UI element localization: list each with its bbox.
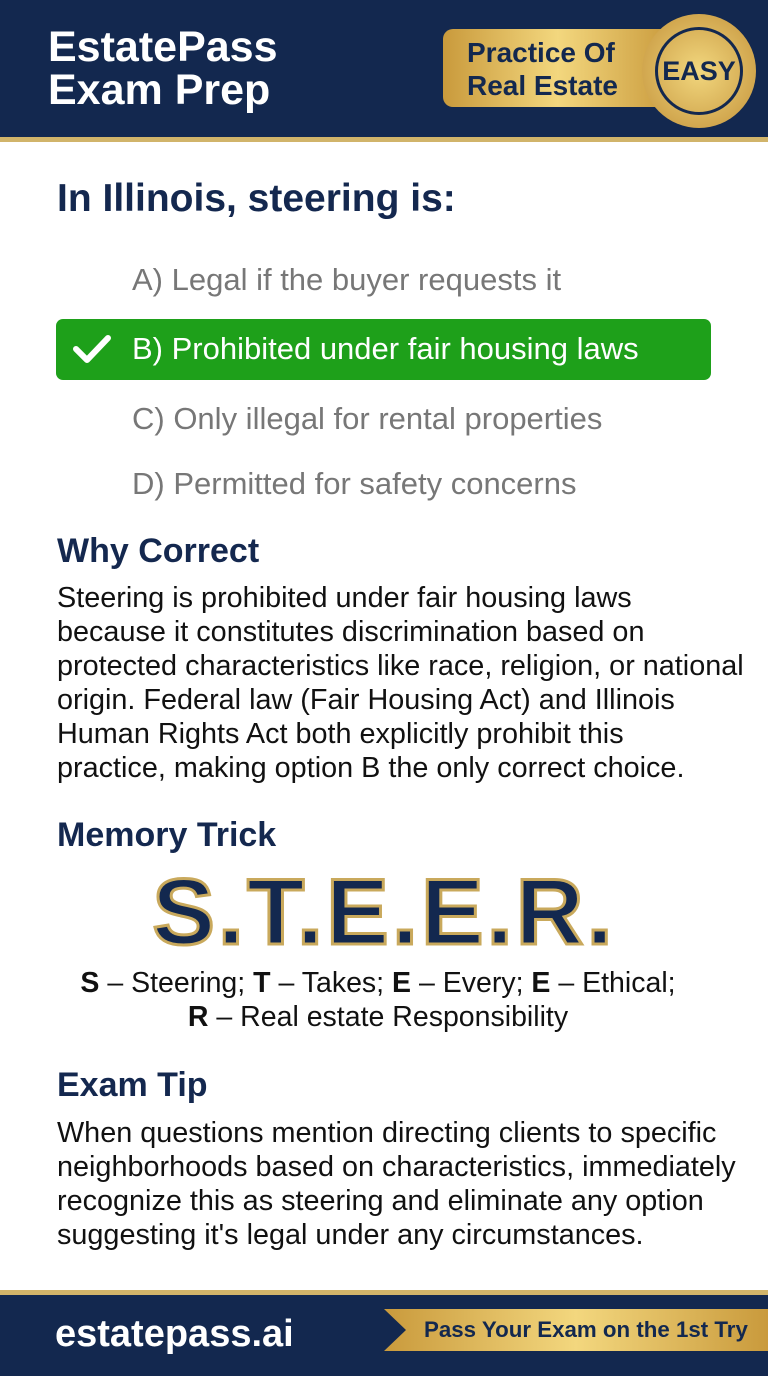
text: why correct: because it constitutes discrimination based on [57,616,644,648]
banner: pass your exam [384,1309,768,1351]
heading: memory trick: Memory Trick [57,816,276,854]
text: exam tip: recognize this as steering and eliminate any option [57,1185,704,1217]
text: why correct: origin. Federal law (Fair Housing Act) and Illinois [57,684,675,716]
text: why correct [57,582,744,784]
heading: exam tip: Exam Tip [57,1066,208,1104]
mnemonic STEER: S.T.E.E.R. [152,859,616,964]
option C: C) Only illegal for rental properties [132,401,602,436]
mnemonic explanation: R – Real estate Responsibility [188,1001,568,1033]
icon: EASY seal [642,14,756,128]
brand title: Exam Prep [48,66,270,114]
text: exam tip [57,1117,736,1251]
badge: practice of real estate [443,29,673,107]
text: why correct: practice, making option B the only correct choice. [57,752,684,784]
mnemonic explanation: S – Steering; T – Takes; E – Every; E – Ethical; [80,967,676,999]
text: exam tip: When questions mention directing clients to specific [57,1117,716,1149]
icon: EASY seal: EASY [662,56,736,86]
brand title: EstatePass [48,23,278,71]
option D: D) Permitted for safety concerns [132,466,576,501]
question heading: In Illinois, steering is: [57,177,456,220]
footer url: estatepass.ai [55,1313,294,1355]
footer [0,1290,768,1376]
icon: check mark [73,335,111,363]
badge: practice of real estate: Practice Of [467,37,615,68]
text: why correct: Steering is prohibited under fair housing laws [57,582,632,614]
banner: pass your exam: Pass Your Exam on the 1st Try [424,1317,748,1342]
brand title [48,23,278,114]
option B correct: B) Prohibited under fair housing laws [132,331,639,366]
option B correct [56,319,711,380]
text: why correct: protected characteristics like race, religion, or national [57,650,744,682]
text: why correct: Human Rights Act both explicitly prohibit this [57,718,624,750]
option A: A) Legal if the buyer requests it [132,262,561,297]
mnemonic explanation [80,967,676,1033]
badge: practice of real estate: Real Estate [467,70,618,101]
text: exam tip: suggesting it's legal under any circumstances. [57,1219,644,1251]
header [0,0,768,142]
text: exam tip: neighborhoods based on characteristics, immediately [57,1151,736,1183]
heading: why correct: Why Correct [57,532,259,570]
